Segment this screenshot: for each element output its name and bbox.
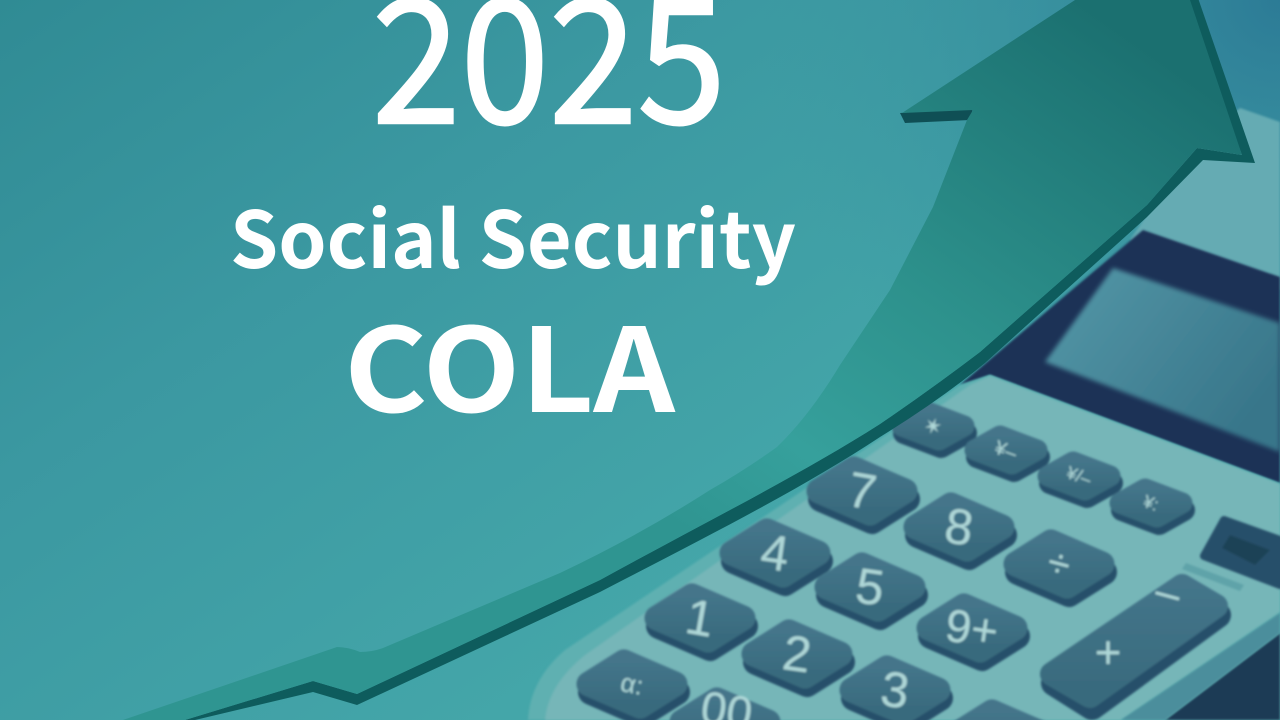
key: top row 4: ¥: xyxy=(1140,491,1161,515)
key: top row 3 xyxy=(1048,462,1112,497)
key: top row 3: ¥/– xyxy=(1063,462,1094,490)
key: plus minus long: – xyxy=(1150,566,1187,620)
title xyxy=(230,0,796,446)
key: top row 4 xyxy=(1120,489,1184,524)
key: divide: ÷ xyxy=(1043,540,1075,588)
calculator key surface xyxy=(545,376,1280,720)
key: top row 2: ¥– xyxy=(991,436,1021,465)
key: bottom right partial xyxy=(957,712,1045,720)
key: divide xyxy=(1016,540,1104,594)
calculator keypad xyxy=(589,412,1280,720)
key: 8 xyxy=(916,497,1004,557)
key: 5: 5 xyxy=(852,557,888,617)
key: right edge button xyxy=(1204,520,1280,585)
key: 3 xyxy=(852,660,940,720)
key: 8: 8 xyxy=(941,497,977,557)
key: 2: 2 xyxy=(779,624,815,684)
calculator top casing xyxy=(1130,108,1280,290)
key: 9+ xyxy=(929,599,1017,658)
key: symbol: α: xyxy=(618,667,646,701)
key: 4: 4 xyxy=(757,523,793,583)
key: 2 xyxy=(754,624,842,684)
key: 9+: 9+ xyxy=(942,599,1002,657)
calculator display bezel xyxy=(960,230,1280,483)
calculator xyxy=(528,108,1280,720)
title: Social Security: Social Security xyxy=(230,179,796,291)
arrow barb shadow xyxy=(900,110,972,123)
key: top row 2 xyxy=(975,436,1039,471)
key: plus minus long xyxy=(1052,566,1218,707)
key: 3: 3 xyxy=(877,660,913,720)
key: 00 xyxy=(682,681,770,720)
key: plus minus long: + xyxy=(1095,626,1121,678)
key: 7 xyxy=(819,461,907,521)
title: COLA: COLA xyxy=(344,278,676,446)
calculator lower right edge xyxy=(1165,633,1280,720)
key: 1 xyxy=(657,588,745,648)
calculator body rim xyxy=(528,375,1280,720)
key: top row 1: ✶ xyxy=(920,412,946,441)
calculator display screen xyxy=(1045,268,1280,452)
key: 5 xyxy=(827,557,915,617)
key: 1: 1 xyxy=(681,588,719,648)
key: 4 xyxy=(732,523,820,583)
key: symbol xyxy=(589,662,677,714)
key: 7: 7 xyxy=(843,461,881,521)
key: top row 1 xyxy=(902,412,966,447)
indicator strip xyxy=(1182,563,1244,591)
